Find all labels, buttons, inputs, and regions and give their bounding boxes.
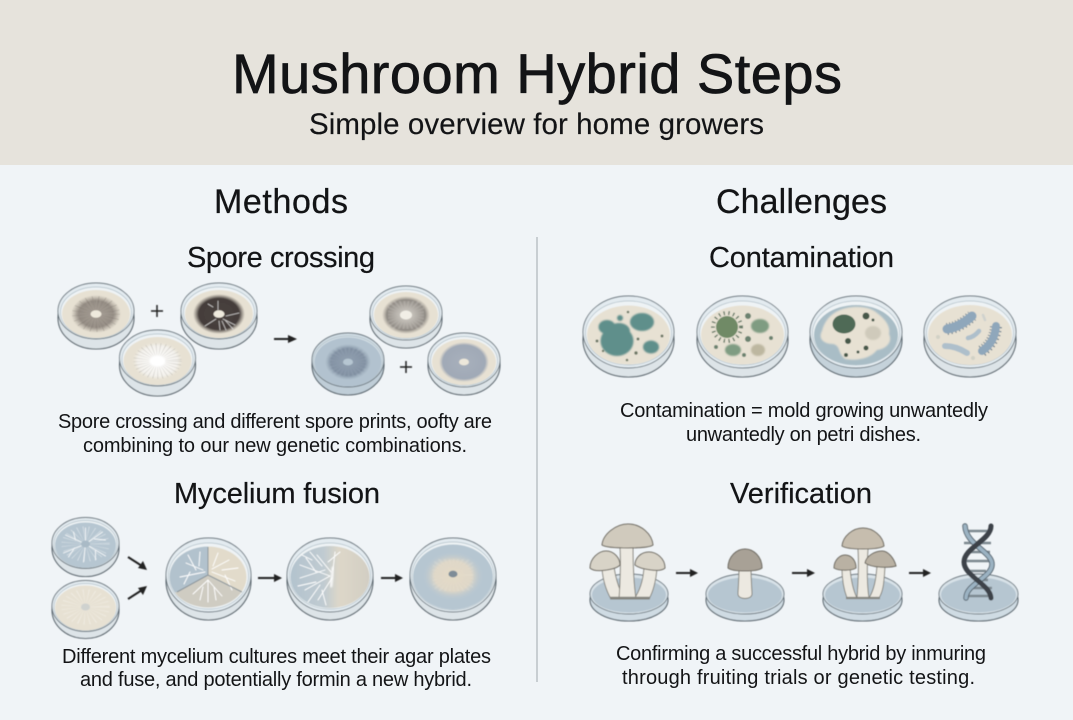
arrow (128, 557, 147, 570)
dish: brown spore print (58, 283, 134, 349)
plus sign (400, 361, 412, 373)
dish: spreading blue mold (810, 296, 902, 377)
arrow (381, 574, 403, 582)
heading: methods: Methods (214, 183, 348, 221)
caption line 2: mycelium fusion: and fuse, and potentially formin a new hybrid. (80, 669, 472, 691)
dish: result blue (312, 333, 384, 395)
dish: beige mycelium culture (52, 580, 119, 638)
subheading: contamination: Contamination (709, 242, 894, 274)
dish: fusing mycelium (287, 538, 373, 620)
panel: challenges (583, 183, 1018, 689)
caption: contamination: Contamination = mold growing unwantedly (620, 400, 988, 422)
plus sign (151, 305, 163, 317)
dish: white spore print (120, 330, 196, 396)
dish: dark spore print (181, 283, 257, 349)
arrow (676, 569, 698, 577)
subheading: spore crossing: Spore crossing (187, 242, 375, 274)
illustration: contaminated dishes (583, 296, 1016, 377)
subheading: verification: Verification (730, 478, 872, 510)
dish: result grey (428, 333, 500, 395)
illustration: mycelium fusion dishes (52, 518, 496, 638)
caption line 2: spore crossing: combining to our new genetic combinations. (83, 435, 467, 457)
arrow (792, 569, 815, 577)
caption line 2: contamination: unwantedly on petri dishes. (686, 424, 921, 446)
dish: blue mycelium culture (52, 518, 119, 576)
dish with mushroom cluster (590, 524, 668, 621)
caption: verification: Confirming a successful hybrid by inmuring (616, 643, 986, 665)
dish with single mushroom (706, 549, 784, 621)
arrow (128, 586, 147, 599)
subtitle: Simple overview for home growers (309, 108, 764, 141)
dish: three-sector fusion (165, 538, 251, 620)
arrow (274, 335, 297, 343)
illustration: verification sequence (590, 524, 1018, 621)
arrow (258, 574, 282, 582)
column divider (536, 237, 538, 682)
illustration: spore crossing dishes (58, 283, 500, 396)
dish with DNA helix (939, 526, 1018, 621)
caption line 2: verification: through fruiting trials or genetic testing. (622, 667, 975, 689)
subheading: mycelium fusion: Mycelium fusion (174, 478, 380, 510)
caption: mycelium fusion: Different mycelium cultures meet their agar plates (62, 646, 491, 668)
dish: green mold colonies (583, 296, 674, 377)
header band (0, 0, 1073, 165)
heading: challenges: Challenges (716, 183, 887, 221)
caption: spore crossing: Spore crossing and different spore prints, oofty are (58, 411, 492, 433)
dish with mature mushrooms (823, 528, 902, 621)
dish: bacteria (924, 296, 1016, 377)
panel: methods (52, 183, 500, 691)
arrow (909, 569, 931, 577)
dish: result mixed (370, 286, 442, 348)
dish: hybrid colony (410, 538, 496, 620)
dish: virus-shaped growth (697, 296, 788, 377)
title: Mushroom Hybrid Steps (232, 42, 842, 105)
